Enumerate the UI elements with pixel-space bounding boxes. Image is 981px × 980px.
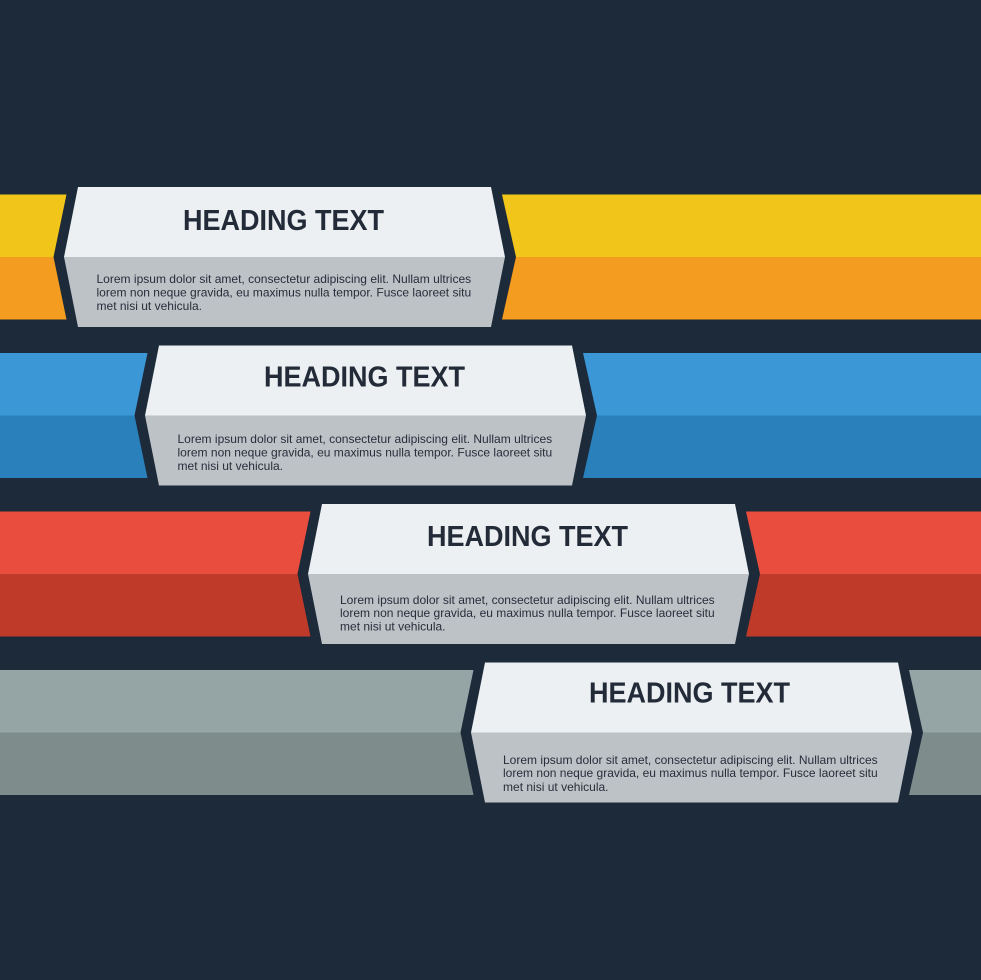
right bar blue <box>583 353 981 416</box>
body text: lorem non neque gravida, eu maximus nulla tempor. Fusce laoreet situ <box>340 606 715 620</box>
body text: met nisi ut vehicula. <box>503 780 609 794</box>
right bar lower shade <box>909 732 981 795</box>
heading: HEADING TEXT <box>264 362 465 394</box>
left bar lower shade <box>0 257 66 320</box>
body text: Lorem ipsum dolor sit amet, consectetur adipiscing elit. Nullam ultrices <box>340 593 715 607</box>
heading: HEADING TEXT <box>589 678 790 710</box>
heading: HEADING TEXT <box>183 205 384 237</box>
right bar red <box>746 512 981 574</box>
left bar grey <box>0 670 474 732</box>
right bar lower shade <box>746 574 981 636</box>
right bar grey <box>909 670 981 732</box>
body text: Lorem ipsum dolor sit amet, consectetur adipiscing elit. Nullam ultrices <box>96 272 471 286</box>
body text: met nisi ut vehicula. <box>178 459 283 473</box>
left bar lower shade <box>0 574 310 636</box>
right bar lower shade <box>502 257 981 320</box>
body text: lorem non neque gravida, eu maximus nulla tempor. Fusce laoreet situ <box>178 446 552 460</box>
left bar yellow <box>0 194 66 257</box>
banner row 2: blue <box>0 346 981 486</box>
body text: met nisi ut vehicula. <box>96 299 202 313</box>
banner row 4: grey <box>0 662 981 802</box>
card bottom <box>308 574 749 644</box>
body text: Lorem ipsum dolor sit amet, consectetur adipiscing elit. Nullam ultrices <box>503 753 878 767</box>
body text: lorem non neque gravida, eu maximus nulla tempor. Fusce laoreet situ <box>96 286 471 300</box>
heading: HEADING TEXT <box>427 521 628 553</box>
card top <box>145 346 586 416</box>
card bottom <box>145 416 586 486</box>
card bottom <box>64 257 505 327</box>
banner row 3: red <box>0 504 981 644</box>
card bottom <box>471 732 912 802</box>
card top <box>471 662 912 732</box>
body text: met nisi ut vehicula. <box>340 620 446 634</box>
body text: lorem non neque gravida, eu maximus nulla tempor. Fusce laoreet situ <box>503 766 878 780</box>
banner row 1: yellow <box>0 187 981 327</box>
card top <box>64 187 505 257</box>
left bar lower shade <box>0 732 474 795</box>
left bar lower shade <box>0 416 148 478</box>
left bar blue <box>0 353 148 416</box>
body text: Lorem ipsum dolor sit amet, consectetur adipiscing elit. Nullam ultrices <box>178 432 552 446</box>
right bar yellow <box>502 194 981 257</box>
card top <box>308 504 749 574</box>
left bar red <box>0 512 310 574</box>
right bar lower shade <box>583 416 981 478</box>
